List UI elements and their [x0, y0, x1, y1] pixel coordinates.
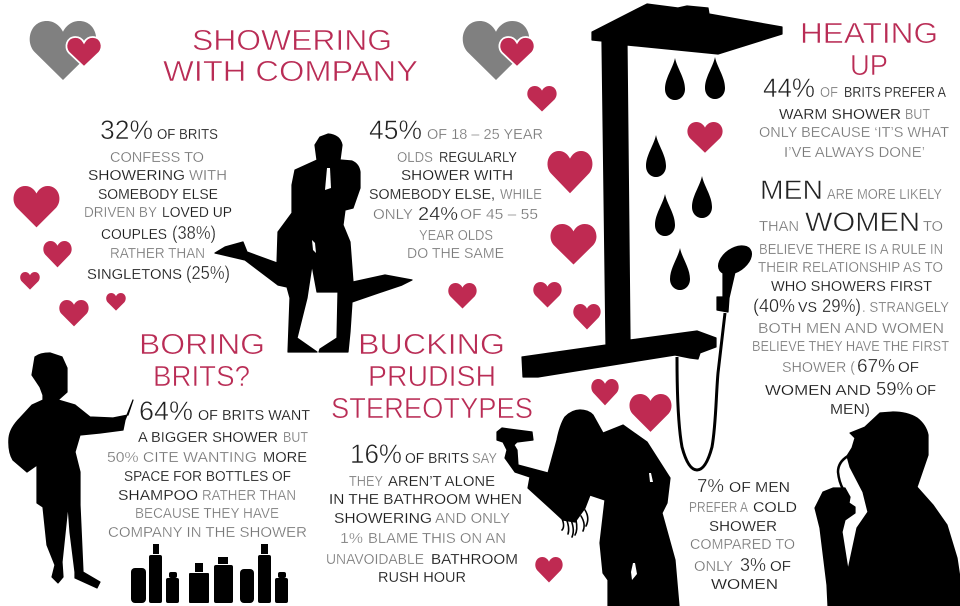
text block: men and women rule about showering first: WHO SHOWERS FIRST — [771, 278, 932, 295]
text block: 45 percent of 18 to 25 year olds: 45% — [369, 115, 422, 145]
text block: men and women rule about showering first: MEN — [760, 175, 823, 205]
heading: bucking prudish stereotypes — [331, 329, 533, 425]
text block: 64 percent want a bigger shower: SPACE FOR BOTTLES OF — [124, 468, 291, 485]
text block: 45 percent of 18 to 25 year olds: YEAR OLDS — [419, 227, 493, 244]
text block: men and women rule about showering first: (40% — [753, 296, 795, 316]
text block: 16 percent not alone in the bathroom: OF BRITS — [405, 450, 469, 467]
text block: 44 percent prefer a warm shower: OF — [820, 84, 838, 101]
text block: 16 percent not alone in the bathroom: UNAVOIDABLE — [326, 551, 424, 568]
icon: shower frame — [522, 4, 782, 470]
text block: 7 percent of men prefer a cold shower — [689, 476, 797, 593]
text block: men and women rule about showering first: SHOWER ( — [782, 359, 855, 376]
text block: 32 percent of Brits: (25%) — [186, 263, 230, 283]
text block: 44 percent prefer a warm shower: BUT — [905, 106, 930, 123]
text block: 45 percent of 18 to 25 year olds: OF 18 – 25 YEAR — [427, 126, 543, 143]
text block: 45 percent of 18 to 25 year olds: SOMEBODY ELSE, — [369, 186, 495, 203]
heading: heating up: UP — [850, 50, 888, 82]
text block: 32 percent of Brits: COUPLES — [101, 226, 167, 243]
icon: red hearts left — [14, 186, 126, 326]
text block: 32 percent of Brits: RATHER THAN — [110, 245, 205, 262]
heading: boring Brits: BORING — [139, 329, 265, 361]
text block: men and women rule about showering first: VS — [798, 299, 817, 316]
text block: men and women rule about showering first: TO — [923, 218, 943, 235]
text block: 7 percent of men prefer a cold shower: OF — [770, 558, 791, 575]
text block: 64 percent want a bigger shower — [107, 396, 310, 541]
icon: right grey and red hearts — [463, 21, 535, 80]
heading: showering with company: SHOWERING — [192, 25, 392, 57]
text block: 32 percent of Brits: LOVED UP — [162, 204, 232, 221]
text block: 16 percent not alone in the bathroom: THEY — [349, 473, 383, 490]
text block: men and women rule about showering first: . STRANGELY — [862, 299, 949, 316]
icon: man brushing teeth silhouette — [815, 412, 960, 606]
text block: 45 percent of 18 to 25 year olds: ONLY — [373, 206, 413, 223]
icon: red hearts centre — [448, 86, 723, 583]
text block: 64 percent want a bigger shower: MORE — [263, 449, 307, 466]
text block: 16 percent not alone in the bathroom: AND ONLY — [435, 510, 510, 527]
text block: 44 percent prefer a warm shower: I’VE ALWAYS DONE’ — [784, 144, 925, 161]
heading: boring Brits — [139, 329, 265, 393]
text block: 7 percent of men prefer a cold shower: COLD — [753, 499, 797, 516]
icon: kissing couple silhouette — [215, 134, 412, 352]
text block: men and women rule about showering first: WOMEN — [805, 207, 920, 237]
text block: 64 percent want a bigger shower: BUT — [283, 429, 308, 446]
text block: 32 percent of Brits: WITH — [189, 167, 227, 184]
icon: shampoo bottles — [131, 544, 288, 603]
text block: 7 percent of men prefer a cold shower: ONLY — [694, 558, 733, 575]
text block: 16 percent not alone in the bathroom: 16% — [350, 439, 402, 469]
text block: 32 percent of Brits — [84, 115, 232, 283]
text block: 45 percent of 18 to 25 year olds: OLDS — [397, 149, 433, 166]
text block: 7 percent of men prefer a cold shower: OF MEN — [729, 479, 790, 496]
text block: 7 percent of men prefer a cold shower: 3% — [740, 555, 766, 575]
text block: 16 percent not alone in the bathroom: BATHROOM — [431, 551, 518, 568]
text block: men and women rule about showering first: OF — [916, 382, 936, 399]
heading: bucking prudish stereotypes: BUCKING — [358, 329, 505, 361]
text block: men and women rule about showering first: 29%) — [822, 296, 861, 316]
text block: 32 percent of Brits: CONFESS TO — [110, 149, 204, 166]
text block: 16 percent not alone in the bathroom: 1% — [340, 530, 363, 547]
text block: 64 percent want a bigger shower: 50% CITE WANTING — [107, 449, 257, 466]
text block: 64 percent want a bigger shower: COMPANY IN THE SHOWER — [108, 524, 307, 541]
text block: 7 percent of men prefer a cold shower: SHOWER — [709, 518, 777, 535]
text block: 64 percent want a bigger shower: OF BRITS WANT — [198, 407, 310, 424]
text block: 45 percent of 18 to 25 year olds: SHOWER WITH — [401, 167, 513, 184]
icon: left grey and red hearts — [30, 21, 102, 80]
text block: men and women rule about showering first: OF — [898, 359, 919, 376]
heading: showering with company: WITH COMPANY — [163, 56, 418, 88]
text block: 45 percent of 18 to 25 year olds: REGULARLY — [439, 149, 517, 166]
heading: heating up: HEATING — [800, 18, 938, 50]
text block: 64 percent want a bigger shower: BECAUSE THEY HAVE — [135, 505, 279, 522]
text block: 45 percent of 18 to 25 year olds: OF 45 – 55 — [460, 206, 538, 223]
text block: men and women rule about showering first: BOTH MEN AND WOMEN — [758, 320, 944, 337]
text block: 64 percent want a bigger shower: A BIGGER SHOWER — [138, 429, 278, 446]
heading: bucking prudish stereotypes: STEREOTYPES — [331, 393, 533, 425]
text block: 16 percent not alone in the bathroom: IN THE BATHROOM WHEN — [329, 491, 522, 508]
text block: men and women rule about showering first: MEN) — [830, 401, 870, 418]
text block: 32 percent of Brits: SHOWERING — [88, 167, 185, 184]
text block: men and women rule about showering first: 67% — [857, 356, 895, 376]
text block: 16 percent not alone in the bathroom: SHOWERING — [334, 510, 432, 527]
text block: 7 percent of men prefer a cold shower: WOMEN — [711, 576, 778, 593]
text block: 64 percent want a bigger shower: RATHER THAN — [202, 487, 296, 504]
heading: bucking prudish stereotypes: PRUDISH — [368, 361, 496, 393]
text block: 32 percent of Brits: OF BRITS — [157, 126, 218, 143]
text block: 64 percent want a bigger shower: 64% — [139, 396, 193, 426]
text block: 32 percent of Brits: DRIVEN BY — [84, 204, 157, 221]
text block: 7 percent of men prefer a cold shower: 7% — [697, 476, 724, 496]
icon: woman with hair dryer silhouette — [497, 410, 679, 606]
text block: 7 percent of men prefer a cold shower: COMPARED TO — [690, 536, 795, 553]
text block: men and women rule about showering first: ARE MORE LIKELY — [827, 186, 942, 203]
text block: 7 percent of men prefer a cold shower: PREFER A — [689, 499, 748, 516]
text block: men and women rule about showering first: 59% — [876, 379, 913, 399]
text block: 16 percent not alone in the bathroom: RUSH HOUR — [378, 569, 466, 586]
text block: men and women rule about showering first: THEIR RELATIONSHIP AS TO — [758, 259, 943, 276]
text block: 44 percent prefer a warm shower: ONLY BECAUSE ‘IT’S WHAT — [759, 124, 949, 141]
icon: woman in towel silhouette — [9, 353, 133, 588]
text block: 44 percent prefer a warm shower: 44% — [763, 73, 815, 103]
text block: 32 percent of Brits: SINGLETONS — [87, 266, 182, 283]
text block: 16 percent not alone in the bathroom: BLAME THIS ON AN — [368, 530, 506, 547]
text block: 45 percent of 18 to 25 year olds: WHILE — [500, 186, 542, 203]
text block: 16 percent not alone in the bathroom: SAY — [472, 450, 497, 467]
text block: men and women rule about showering first — [752, 175, 949, 418]
heading: showering with company — [163, 25, 418, 88]
text block: 32 percent of Brits: (38%) — [172, 223, 216, 243]
text block: 32 percent of Brits: 32% — [100, 115, 153, 145]
heading: boring Brits: BRITS? — [153, 361, 250, 393]
text block: men and women rule about showering first: THAN — [759, 218, 799, 235]
text block: 45 percent of 18 to 25 year olds: DO THE SAME — [407, 245, 504, 262]
text block: 44 percent prefer a warm shower — [759, 73, 949, 161]
heading: heating up — [800, 18, 938, 82]
text block: 32 percent of Brits: SOMEBODY ELSE — [98, 186, 218, 203]
text block: 45 percent of 18 to 25 year olds — [369, 115, 543, 262]
text block: 16 percent not alone in the bathroom: AREN’T ALONE — [388, 473, 495, 490]
text block: men and women rule about showering first: WOMEN AND — [765, 382, 871, 399]
text block: 64 percent want a bigger shower: SHAMPOO — [118, 487, 198, 504]
text block: 44 percent prefer a warm shower: WARM SHOWER — [779, 106, 901, 123]
text block: 45 percent of 18 to 25 year olds: 24% — [418, 204, 458, 224]
icon: water drops — [646, 57, 725, 290]
text block: 16 percent not alone in the bathroom — [326, 439, 522, 586]
